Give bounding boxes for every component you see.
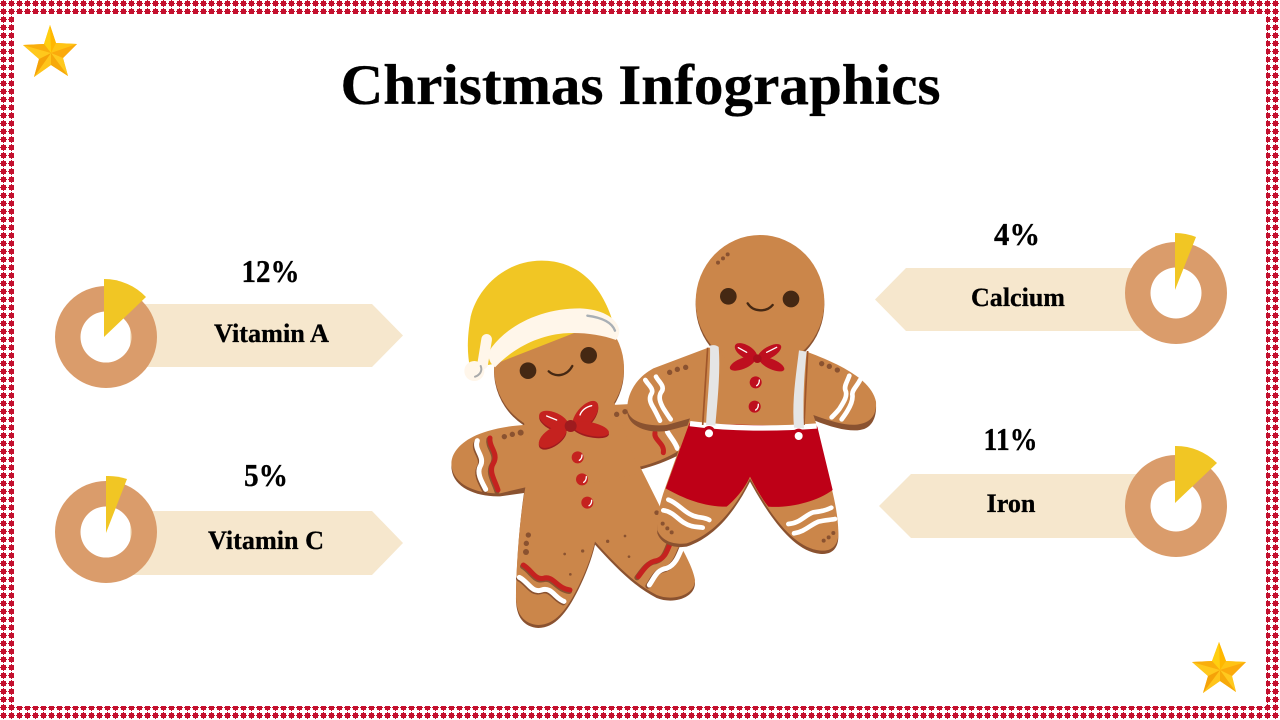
buttons: [749, 376, 762, 413]
donut: Calcium: [1125, 233, 1227, 344]
body shadow: [451, 306, 707, 628]
suspenders: [703, 345, 808, 428]
bow tie: [535, 396, 610, 454]
illustration: gingerbread with red shorts: [627, 235, 876, 554]
arrow: Calcium label bar: [875, 268, 1150, 331]
title: Christmas Infographics: [340, 54, 940, 117]
crumbs: [502, 409, 659, 576]
crumbs: [661, 361, 840, 543]
label: Vitamin C: Vitamin C: [208, 526, 324, 555]
body shadow: [627, 238, 876, 554]
panel: Vitamin A: [55, 253, 403, 388]
panel: Vitamin C: [55, 457, 403, 583]
value: 4%: 4%: [994, 216, 1040, 252]
star: top left: [23, 25, 77, 77]
icing: [476, 432, 682, 603]
arrow: Iron label bar: [879, 474, 1150, 538]
icing: [645, 376, 860, 533]
hat: [464, 261, 619, 381]
arrow: Vitamin A label bar: [130, 304, 403, 367]
face: [520, 347, 597, 379]
label: Vitamin A: Vitamin A: [214, 319, 329, 348]
buttons: [572, 451, 593, 509]
illustration: gingerbread with yellow hat: [451, 261, 707, 628]
value: 5%: 5%: [244, 457, 288, 493]
face: [716, 252, 799, 310]
body: [451, 303, 707, 625]
donut: Iron: [1125, 446, 1227, 557]
label: Iron: Iron: [986, 489, 1036, 518]
value: 12%: 12%: [242, 253, 300, 289]
arrow: Vitamin C label bar: [130, 511, 403, 575]
donut: Vitamin A: [55, 279, 157, 388]
label: Calcium: Calcium: [971, 283, 1065, 312]
donut: Vitamin C: [55, 476, 157, 583]
panel: Iron: [879, 421, 1227, 557]
star: bottom right: [1192, 642, 1246, 693]
panel: Calcium: [875, 216, 1227, 344]
value: 11%: 11%: [984, 421, 1038, 457]
bow tie: [728, 340, 786, 374]
shorts: [666, 423, 833, 507]
body: [627, 235, 876, 551]
